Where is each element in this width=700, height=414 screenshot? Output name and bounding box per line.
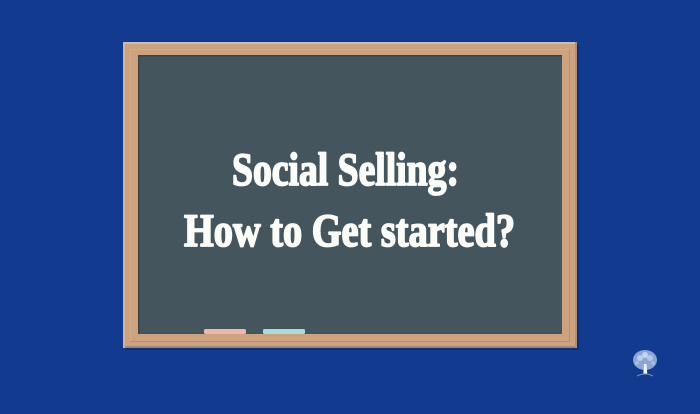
pink chalk bbox=[204, 329, 246, 334]
mint chalk bbox=[263, 329, 305, 334]
wooden frame bbox=[123, 42, 577, 348]
title: How to Get started? bbox=[184, 205, 515, 257]
title bbox=[184, 144, 515, 257]
title: Social Selling: bbox=[232, 144, 459, 196]
chalkboard bbox=[123, 42, 579, 350]
icon: tree logo bbox=[633, 350, 657, 376]
board surface bbox=[138, 55, 562, 334]
